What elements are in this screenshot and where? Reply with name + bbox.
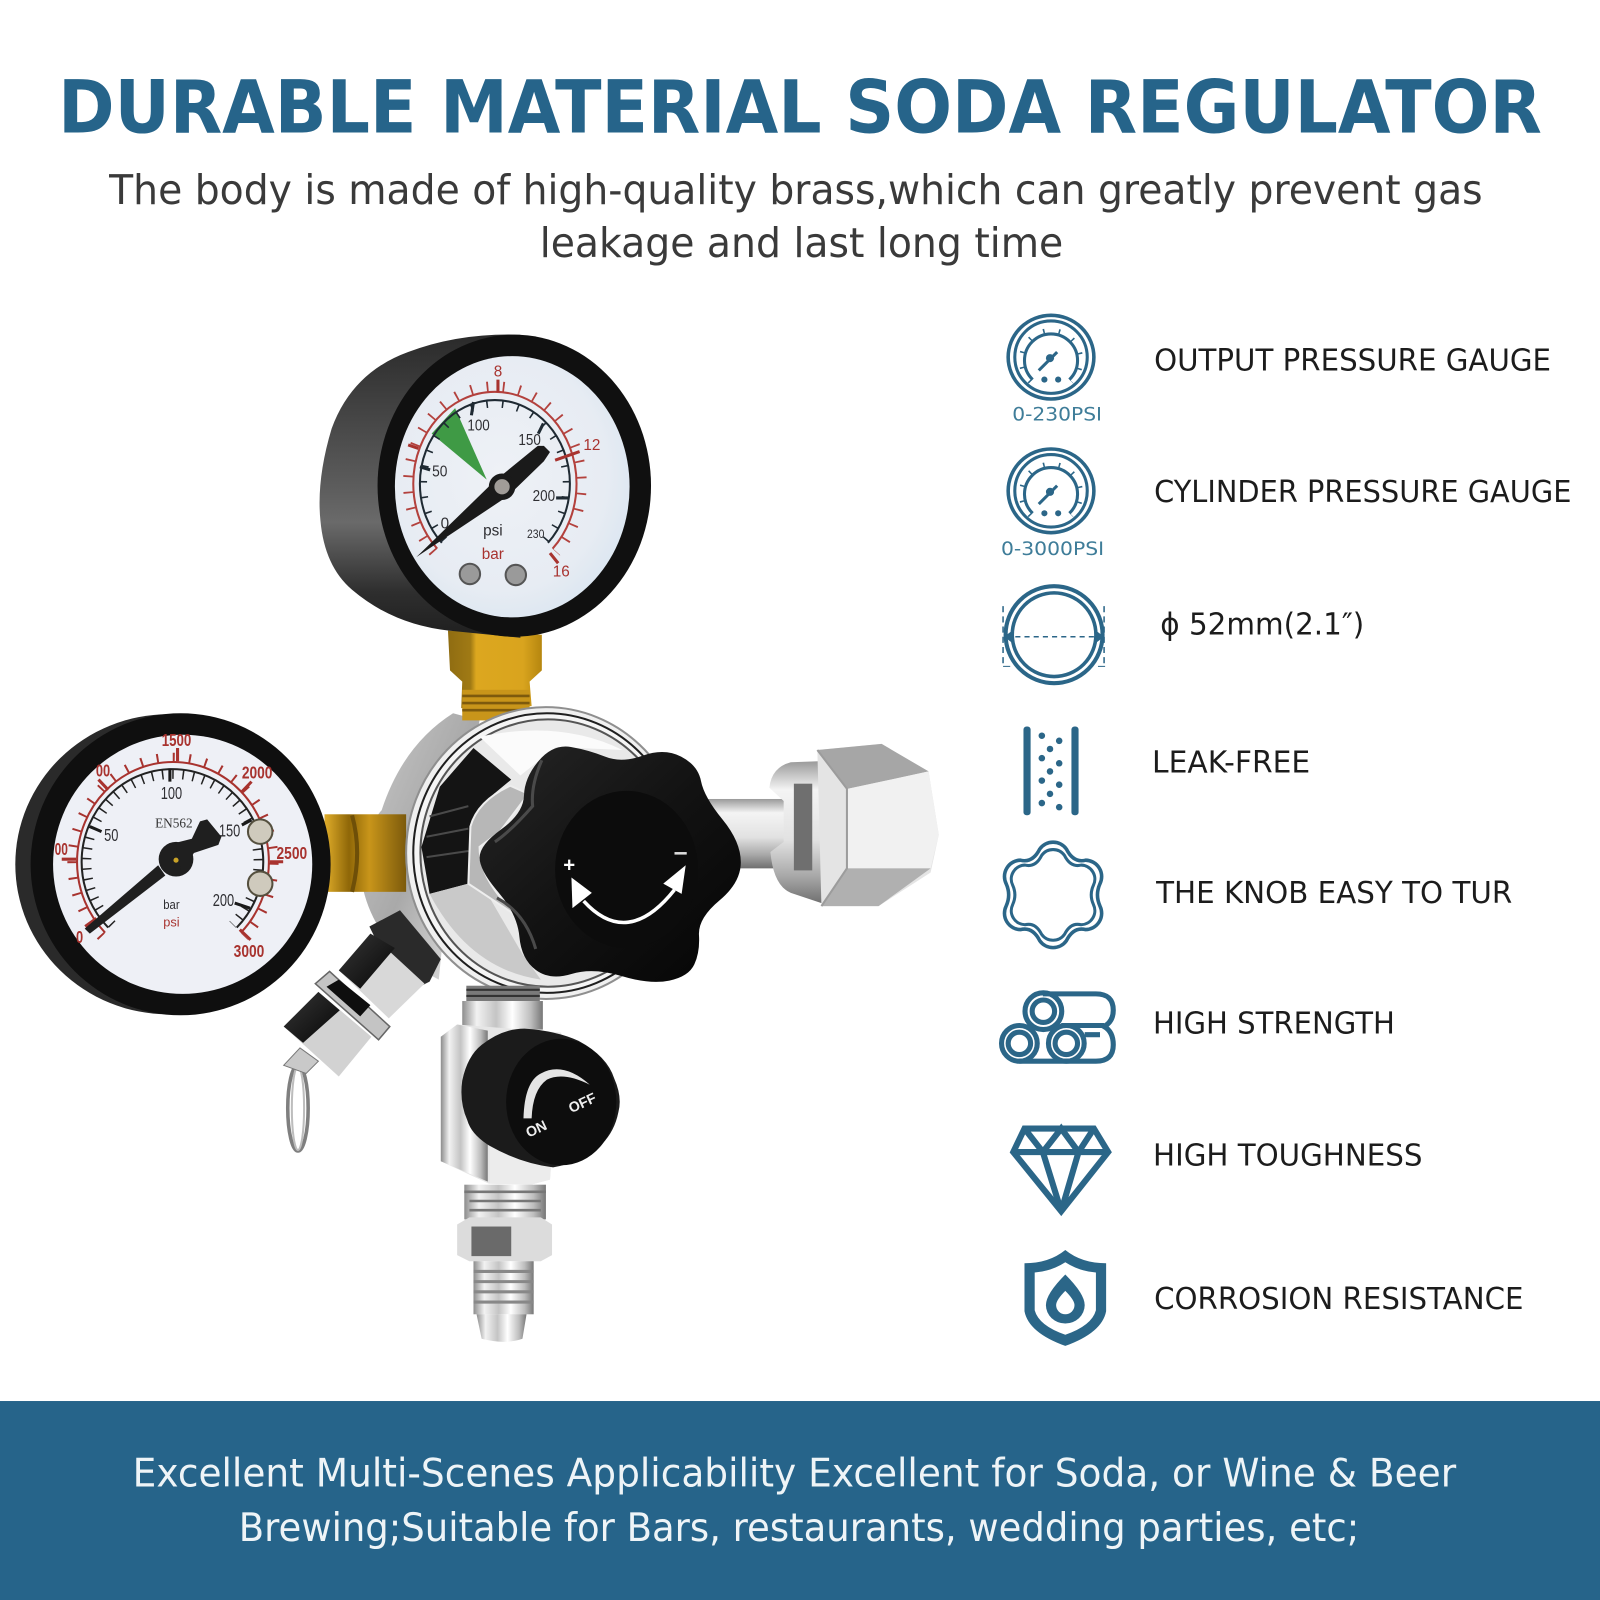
icon: diamond bbox=[1013, 1129, 1108, 1211]
gauge numbers: 00 bbox=[96, 761, 110, 781]
icon: diameter circle bbox=[1003, 586, 1105, 683]
gauge bezel bbox=[31, 713, 331, 1015]
right outlet tube and hex nut bbox=[702, 744, 939, 906]
gauge numbers: 0 bbox=[76, 927, 83, 947]
feature: high strength bbox=[1002, 993, 1395, 1061]
dark thread reflection bbox=[421, 748, 511, 894]
relief valve threads bbox=[369, 910, 441, 995]
gauge numbers: 0 bbox=[441, 516, 449, 533]
knob arrows and signs bbox=[563, 852, 687, 922]
left brass connector bbox=[324, 814, 406, 892]
knob arrows and signs: + bbox=[563, 854, 575, 876]
lower tube bbox=[284, 992, 371, 1077]
label: ϕ 52mm(2.1″) bbox=[1160, 608, 1364, 643]
gauge numbers: 3000 bbox=[234, 941, 264, 961]
feature: leak-free bbox=[1023, 727, 1310, 815]
gauge numbers: 16 bbox=[553, 564, 570, 581]
gauge numbers: psi bbox=[483, 523, 503, 540]
top pressure gauge bbox=[320, 334, 651, 638]
gauge needle bbox=[85, 819, 221, 934]
top brass connector bbox=[448, 631, 542, 720]
shut-off valve block bbox=[441, 1024, 561, 1185]
product photo: soda regulator bbox=[15, 334, 939, 1342]
gauge numbers: 8 bbox=[494, 364, 502, 381]
gauge numbers: 00 bbox=[55, 839, 68, 859]
gauge screws bbox=[460, 564, 526, 585]
scale arcs bbox=[62, 748, 283, 940]
feature: corrosion resistance bbox=[1024, 1250, 1523, 1346]
gauge numbers: 50 bbox=[104, 825, 118, 845]
main body back bbox=[363, 713, 480, 980]
gauge numbers: 2500 bbox=[277, 843, 307, 863]
subtitle: The body is made of high-quality brass,which can greatly prevent gas bbox=[108, 166, 1483, 214]
gauge case bbox=[15, 714, 321, 1014]
key ring bbox=[288, 1065, 308, 1151]
gauge numbers: 12 bbox=[583, 437, 600, 454]
icon: shield with drop bbox=[1024, 1250, 1106, 1346]
gauge numbers bbox=[55, 730, 307, 961]
front chrome disc bbox=[406, 707, 686, 999]
banner text bbox=[133, 1452, 1456, 1551]
major ticks bbox=[408, 380, 580, 563]
bottom collar bbox=[462, 986, 543, 1030]
banner text: Excellent Multi-Scenes Applicability Excellent for Soda, or Wine & Beer bbox=[133, 1452, 1456, 1497]
upper reflection bbox=[480, 730, 622, 776]
gauge numbers: 2000 bbox=[242, 763, 272, 783]
knob highlights bbox=[495, 760, 542, 949]
icon: gauge bbox=[1008, 449, 1094, 533]
gauge numbers: psi bbox=[163, 915, 180, 930]
label: LEAK-FREE bbox=[1152, 745, 1310, 780]
subtitle bbox=[108, 166, 1483, 267]
on-off arc and labels: OFF bbox=[566, 1090, 599, 1117]
gauge numbers: 200 bbox=[533, 488, 555, 505]
lower reflection bbox=[430, 884, 541, 980]
adjustment knob bbox=[480, 746, 741, 982]
feature list bbox=[1001, 315, 1571, 1346]
range label: 0-3000PSI bbox=[1001, 539, 1104, 560]
gauge needle bbox=[416, 446, 550, 557]
gauge bezel bbox=[378, 335, 651, 637]
green zone bbox=[432, 408, 487, 480]
gauge numbers: 100 bbox=[467, 418, 490, 435]
icon: pipes bbox=[1002, 993, 1113, 1061]
label: CYLINDER PRESSURE GAUGE bbox=[1154, 475, 1571, 510]
label: HIGH TOUGHNESS bbox=[1153, 1138, 1422, 1173]
gauge numbers: 100 bbox=[161, 783, 182, 803]
subtitle: leakage and last long time bbox=[540, 219, 1063, 267]
bottom banner bbox=[0, 1401, 1600, 1600]
scale arcs bbox=[408, 380, 582, 563]
label: OUTPUT PRESSURE GAUGE bbox=[1154, 343, 1551, 378]
on-off arc and labels: ON bbox=[524, 1118, 550, 1141]
icon: gauge bbox=[1008, 315, 1094, 399]
range label: 0-230PSI bbox=[1012, 404, 1102, 425]
feature: high toughness bbox=[1013, 1129, 1422, 1211]
feature: cylinder pressure gauge bbox=[1001, 449, 1571, 560]
knob inner dial bbox=[555, 791, 698, 948]
left cylinder gauge bbox=[15, 713, 331, 1015]
upper tube bbox=[339, 934, 424, 1018]
hex collar bbox=[315, 971, 390, 1040]
label: HIGH STRENGTH bbox=[1153, 1007, 1395, 1042]
on-off arc and labels bbox=[523, 1069, 599, 1141]
major ticks bbox=[62, 748, 283, 940]
shut-off knob bbox=[461, 1029, 620, 1167]
gauge numbers: 50 bbox=[432, 464, 447, 481]
gauge numbers: bar bbox=[163, 897, 180, 912]
feature: diameter bbox=[1003, 586, 1364, 683]
threaded outlet bbox=[457, 1185, 552, 1342]
gauge numbers bbox=[432, 364, 600, 581]
label: CORROSION RESISTANCE bbox=[1154, 1282, 1523, 1317]
gauge numbers: 230 bbox=[527, 527, 545, 541]
banner text: Brewing;Suitable for Bars, restaurants, wedding parties, etc; bbox=[239, 1506, 1359, 1551]
gauge case bbox=[320, 334, 520, 638]
gauge numbers: 150 bbox=[219, 821, 240, 841]
gauge screws bbox=[248, 819, 272, 896]
feature: output pressure gauge bbox=[1008, 315, 1551, 425]
icon: leak-free bbox=[1023, 727, 1079, 815]
feature: knob bbox=[1004, 842, 1512, 948]
gauge numbers: EN562 bbox=[155, 816, 193, 831]
gauge face bbox=[53, 735, 312, 994]
inner chrome around knob bbox=[468, 786, 529, 918]
gauge face bbox=[395, 356, 630, 617]
gauge numbers: 1500 bbox=[162, 730, 191, 750]
label: THE KNOB EASY TO TUR bbox=[1155, 876, 1512, 911]
relief valve bbox=[284, 934, 424, 1151]
gauge numbers: bar bbox=[482, 546, 504, 563]
icon: knob outline bbox=[1004, 842, 1102, 948]
gauge numbers: 200 bbox=[213, 890, 234, 910]
gauge numbers: 150 bbox=[518, 432, 541, 449]
